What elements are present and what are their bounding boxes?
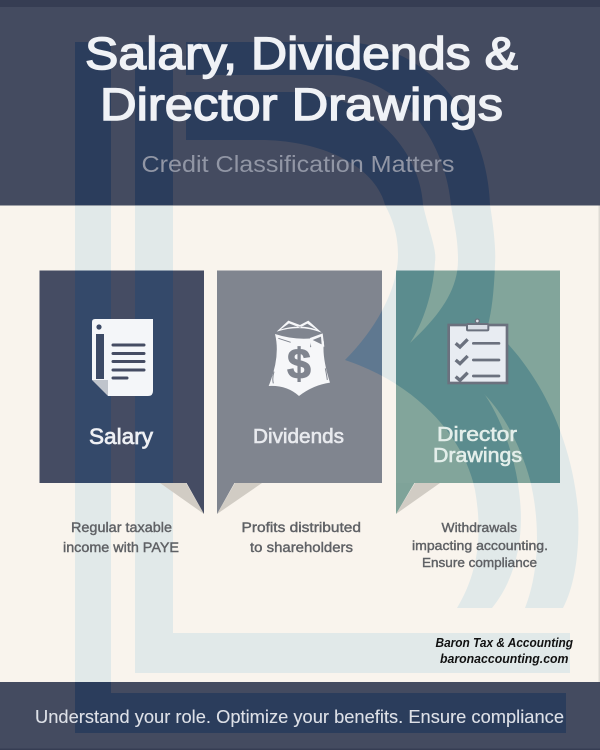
card label: dividends: Dividends [253,426,344,448]
company credit: baronaccounting.com [440,652,568,666]
text block: dividends description: Profits distributed [242,520,361,535]
watermark logo on cream [75,42,578,733]
card label: director drawings: Drawings [433,445,522,467]
card label: director drawings: Director [437,424,517,446]
text block: director drawings description: Withdrawals [442,520,518,535]
icon: money bag: $ [287,341,311,389]
card label: salary: Salary [89,424,153,449]
title: Director Drawings [100,79,503,130]
icon: money bag [269,321,330,396]
company credit: Baron Tax & Accounting [436,636,573,650]
company credit [436,636,573,666]
footer tagline: Understand your role. Optimize your benefits. Ensure compliance [35,706,564,727]
icon: document [92,319,153,396]
text block: dividends description: to shareholders [250,540,353,555]
footer band [0,682,600,750]
icon: clipboard checklist [449,319,507,383]
card tail: salary [160,482,204,514]
card tail: dividends [217,482,262,514]
panel: dividends [217,270,382,514]
text block: director drawings description: impacting accounting. [412,538,548,553]
text block: salary description: income with PAYE [63,540,179,555]
text block: salary description [63,520,179,555]
subtitle: Credit Classification Matters [142,151,454,177]
text block: dividends description [242,520,361,555]
card tail: director drawings [396,482,440,514]
text block: salary description: Regular taxable [71,520,172,535]
header band [0,0,600,206]
panel: salary [40,270,204,514]
text block: director drawings description [412,520,548,570]
card label: director drawings [433,424,522,467]
title [85,28,518,130]
text block: director drawings description: Ensure compliance [422,555,537,570]
panel: director drawings [396,270,560,514]
title: Salary, Dividends & [85,28,518,79]
